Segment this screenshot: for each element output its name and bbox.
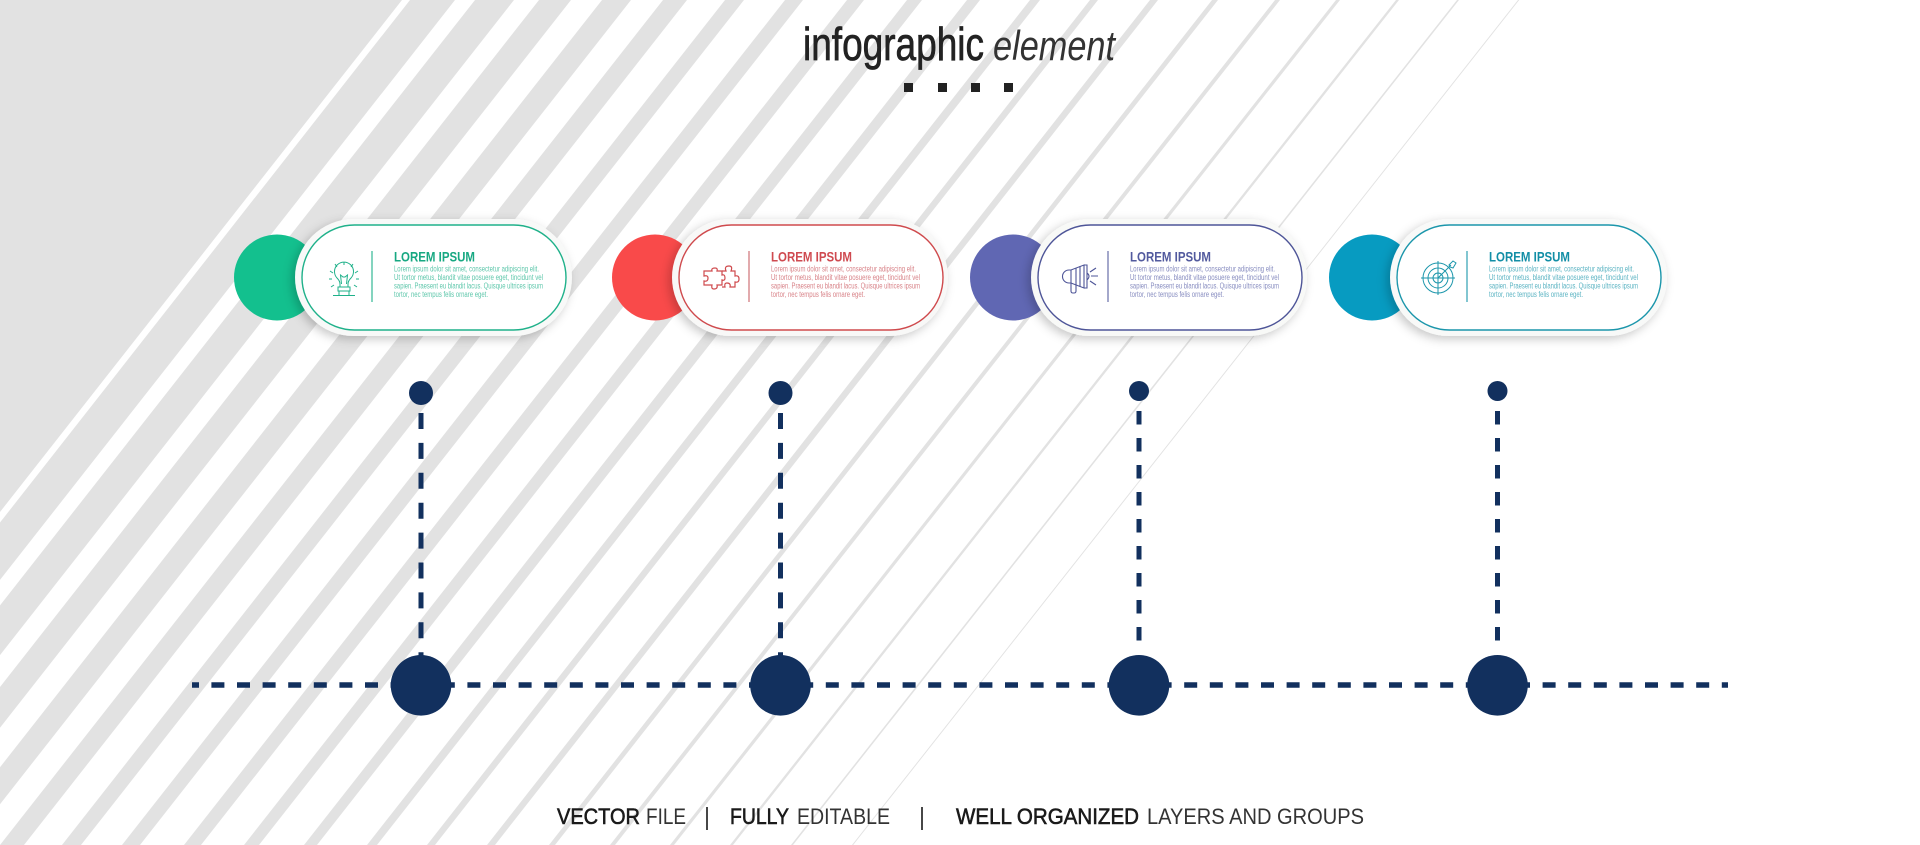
body text: Ut tortor metus, blandit vitae posuere eget, tincidunt vel [771, 273, 920, 282]
body text: sapien. Praesent eu blandit lacus. Quisque ultrices ipsum [394, 282, 543, 291]
body text: sapien. Praesent eu blandit lacus. Quisque ultrices ipsum [1130, 282, 1279, 291]
divider [748, 251, 750, 302]
icon: megaphone [1062, 265, 1098, 293]
footer caption: EDITABLE [797, 804, 890, 829]
heading: lorem ipsum: LOREM IPSUM [1489, 249, 1570, 265]
footer caption: LAYERS AND GROUPS [1147, 804, 1364, 829]
body text [1130, 264, 1279, 299]
heading: lorem ipsum: LOREM IPSUM [1130, 249, 1211, 265]
footer caption [557, 804, 1364, 830]
divider [1466, 251, 1468, 302]
body text: Ut tortor metus, blandit vitae posuere eget, tincidunt vel [1489, 273, 1638, 282]
body text: Ut tortor metus, blandit vitae posuere eget, tincidunt vel [1130, 273, 1279, 282]
footer caption: VECTOR [557, 804, 640, 829]
body text: Lorem ipsum dolor sit amet, consectetur adipiscing elit. [771, 264, 916, 274]
title: infographic [803, 18, 984, 70]
divider [371, 251, 373, 302]
footer caption: FILE [646, 804, 686, 829]
body text [771, 264, 920, 299]
body text: Ut tortor metus, blandit vitae posuere eget, tincidunt vel [394, 273, 543, 282]
body text: tortor, nec tempus felis ornare eget. [771, 290, 865, 299]
body text [1489, 264, 1638, 299]
connector: step 2 [750, 381, 811, 716]
panel: step 3 purple [970, 219, 1307, 336]
icon: puzzle [704, 266, 739, 289]
body text [394, 264, 543, 299]
heading: lorem ipsum: LOREM IPSUM [394, 249, 475, 265]
connector: step 3 [1109, 381, 1169, 716]
panel: step 4 teal [1329, 219, 1667, 336]
body text: sapien. Praesent eu blandit lacus. Quisque ultrices ipsum [771, 282, 920, 291]
panel: step 2 red [612, 219, 948, 336]
footer caption: WELL ORGANIZED [956, 804, 1139, 829]
body text: Lorem ipsum dolor sit amet, consectetur adipiscing elit. [1130, 264, 1275, 274]
body text: Lorem ipsum dolor sit amet, consectetur adipiscing elit. [394, 264, 539, 274]
icon: light bulb [329, 262, 359, 296]
icon: target [1421, 261, 1456, 295]
title: element [993, 22, 1117, 69]
divider [1107, 251, 1109, 302]
body text: tortor, nec tempus felis ornare eget. [394, 290, 488, 299]
timeline: horizontal dashed axis [192, 682, 1728, 688]
heading: lorem ipsum: LOREM IPSUM [771, 249, 852, 265]
footer caption: FULLY [730, 804, 789, 829]
body text: sapien. Praesent eu blandit lacus. Quisque ultrices ipsum [1489, 282, 1638, 291]
connector: step 4 [1467, 381, 1528, 716]
panel: step 1 green [234, 219, 572, 336]
connector: step 1 [391, 381, 451, 716]
title dots [904, 83, 1013, 92]
body text: tortor, nec tempus felis ornare eget. [1130, 290, 1224, 299]
body text: Lorem ipsum dolor sit amet, consectetur adipiscing elit. [1489, 264, 1634, 274]
body text: tortor, nec tempus felis ornare eget. [1489, 290, 1583, 299]
